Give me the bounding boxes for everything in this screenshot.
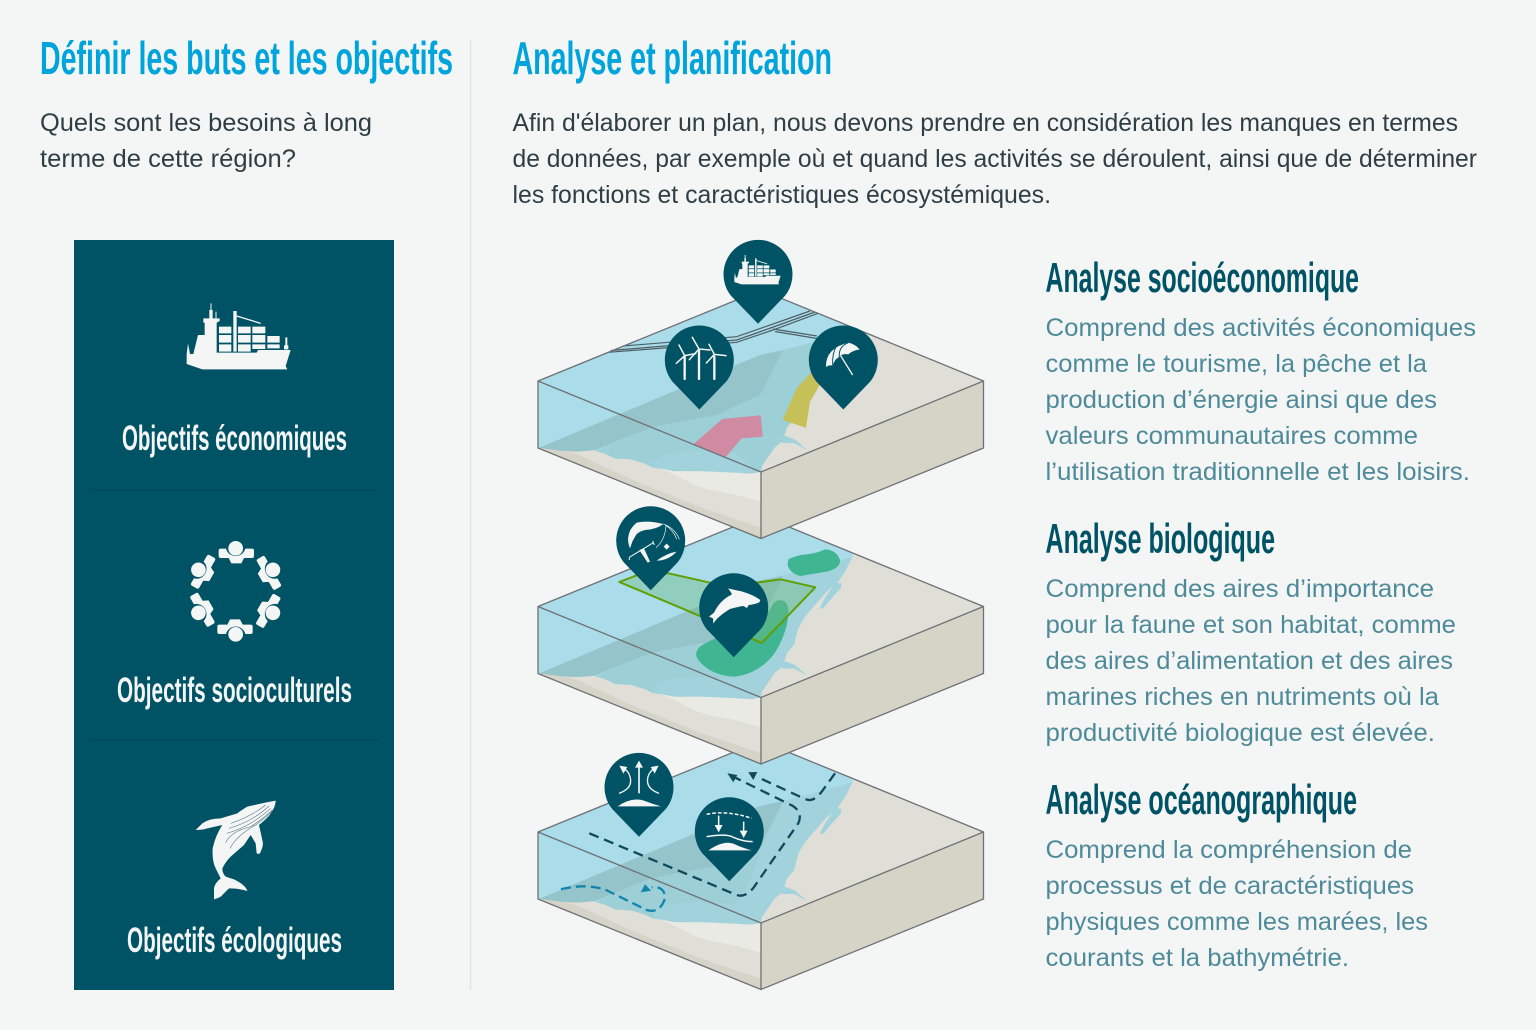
currents: dashed arrows xyxy=(561,772,835,911)
text block: planning intro: Afin d'élaborer un plan, nous devons prendre en considération les manques en termes xyxy=(512,109,1458,137)
text block: planning intro: les fonctions et caractéristiques écosystémiques. xyxy=(512,181,1051,209)
text: socioeconomic description: Comprend des activités économiques xyxy=(1046,314,1476,342)
text: biological description: des aires d’alimentation et des aires xyxy=(1046,647,1453,675)
pin: plankton and fish xyxy=(616,506,685,590)
text block: planning intro: de données, par exemple où et quand les activités se déroulent, ainsi que de déterminer xyxy=(512,145,1477,173)
section: biological analysis xyxy=(1046,515,1456,747)
text: oceanographic description: processus et de caractéristiques xyxy=(1046,872,1414,900)
panel: objectives xyxy=(74,240,394,990)
pin: dolphin xyxy=(699,573,768,657)
heading: biological: Analyse biologique xyxy=(1046,515,1275,562)
text block: planning intro xyxy=(512,109,1477,209)
text block: long-term needs question xyxy=(40,109,372,173)
pin: bathymetry xyxy=(695,797,764,881)
pin: wind turbines xyxy=(665,326,734,410)
zone: fishing area xyxy=(693,415,763,457)
text: biological description: pour la faune et son habitat, comme xyxy=(1046,611,1456,639)
diagram: oceanographic layer xyxy=(538,741,984,990)
text: socioeconomic description: l’utilisation traditionnelle et les loisirs. xyxy=(1046,458,1470,486)
text: socioeconomic description xyxy=(1046,314,1476,486)
text: socioeconomic description: comme le tourisme, la pêche et la xyxy=(1046,350,1427,378)
label: ecological objectives: Objectifs écologiques xyxy=(127,921,342,960)
text: oceanographic description: courants et la bathymétrie. xyxy=(1046,944,1349,972)
section: oceanographic analysis xyxy=(1046,776,1428,972)
text: biological description: marines riches en nutriments où la xyxy=(1046,683,1439,711)
pin: upwelling xyxy=(604,753,674,837)
icon: container ship xyxy=(187,303,291,369)
text: oceanographic description xyxy=(1046,836,1428,972)
text: oceanographic description: physiques comme les marées, les xyxy=(1046,908,1428,936)
pin: ship xyxy=(724,240,792,324)
heading: goals and objectives: Définir les buts et les objectifs xyxy=(40,32,453,84)
icon: humpback whale xyxy=(196,801,276,899)
text: oceanographic description: Comprend la compréhension de xyxy=(1046,836,1412,864)
text: biological description: productivité biologique est élevée. xyxy=(1046,719,1435,747)
zones: habitat areas xyxy=(619,549,840,677)
text block: long-term needs question: Quels sont les besoins à long xyxy=(40,109,372,137)
label: sociocultural objectives: Objectifs socioculturels xyxy=(117,671,352,710)
pin: beach umbrella xyxy=(809,326,878,410)
diagram: socioeconomic layer xyxy=(538,290,984,538)
text: biological description: Comprend des aires d’importance xyxy=(1046,575,1434,603)
text: socioeconomic description: valeurs communautaires comme xyxy=(1046,422,1418,450)
text: socioeconomic description: production d’énergie ainsi que des xyxy=(1046,386,1437,414)
section: socioeconomic analysis xyxy=(1046,254,1476,486)
cables: shipping lanes xyxy=(608,311,818,352)
heading: analysis and planning: Analyse et planification xyxy=(512,32,832,84)
diagram: biological layer xyxy=(538,516,984,764)
text block: long-term needs question: terme de cette région? xyxy=(40,145,296,173)
edges: biological layer outline xyxy=(538,516,984,764)
zone: coastal recreation xyxy=(783,370,822,428)
label: economic objectives: Objectifs économiques xyxy=(122,419,347,458)
text: biological description xyxy=(1046,575,1456,747)
icon: people around a table xyxy=(183,541,288,642)
